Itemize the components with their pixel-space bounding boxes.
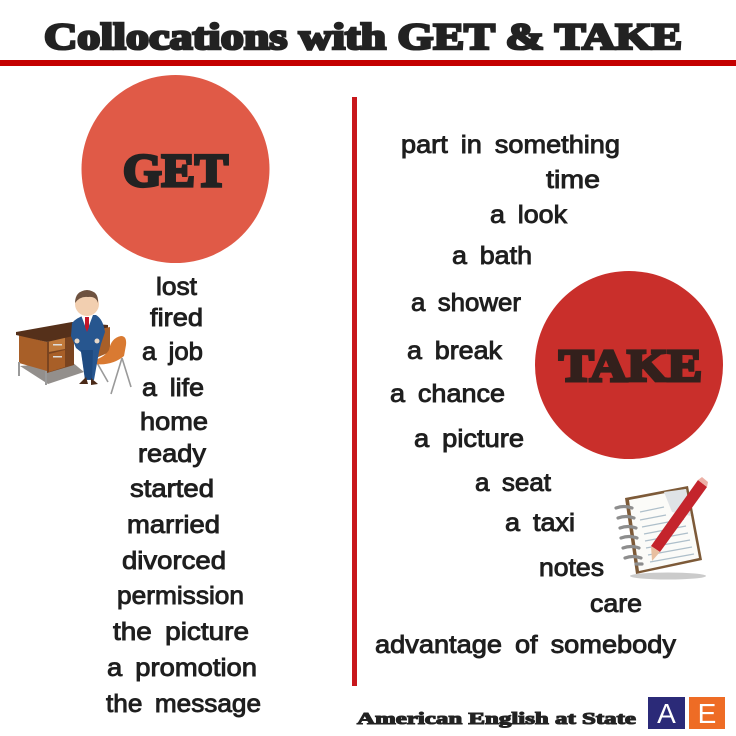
list: TAKE collocations: part in something xyxy=(401,131,620,159)
list: GET collocations: the message xyxy=(106,690,261,718)
footer: source credit: American English at State xyxy=(357,709,637,728)
list: GET collocations: lost xyxy=(156,273,197,301)
list: GET collocations: married xyxy=(127,511,220,539)
logo: AE: A xyxy=(657,698,676,729)
list: TAKE collocations: a break xyxy=(407,337,503,365)
list: GET collocations: permission xyxy=(117,582,244,610)
list: GET collocations: started xyxy=(130,475,214,503)
list: TAKE collocations: time xyxy=(546,166,600,194)
list: TAKE collocations: a taxi xyxy=(505,509,575,537)
list: TAKE collocations: care xyxy=(590,590,642,618)
list: TAKE collocations: a seat xyxy=(475,469,551,497)
list: TAKE collocations: a shower xyxy=(411,289,521,317)
circle: GET xyxy=(82,75,270,263)
list: TAKE collocations: advantage of somebody xyxy=(375,631,677,659)
title underline xyxy=(0,60,736,66)
icon: notepad and pencil xyxy=(616,477,708,580)
icon: businessman at desk xyxy=(16,290,131,394)
list: GET collocations: a life xyxy=(142,374,204,402)
list: TAKE collocations: a picture xyxy=(414,425,524,453)
list: GET collocations xyxy=(106,273,261,718)
list: GET collocations: divorced xyxy=(122,547,226,575)
list: TAKE collocations xyxy=(375,131,677,659)
list: GET collocations: fired xyxy=(150,304,203,332)
circle: TAKE: TAKE xyxy=(559,341,702,391)
title: Collocations with GET & TAKE xyxy=(44,17,682,58)
list: TAKE collocations: a chance xyxy=(390,380,505,408)
list: TAKE collocations: notes xyxy=(539,554,604,582)
list: GET collocations: home xyxy=(140,408,208,436)
logo: AE: E xyxy=(698,698,716,729)
logo: AE xyxy=(648,697,725,729)
list: GET collocations: a promotion xyxy=(107,654,257,682)
circle: TAKE xyxy=(535,271,723,459)
list: TAKE collocations: a bath xyxy=(452,242,532,270)
list: TAKE collocations: a look xyxy=(490,201,568,229)
list: GET collocations: ready xyxy=(138,440,207,468)
column divider xyxy=(352,97,357,686)
list: GET collocations: a job xyxy=(142,338,203,366)
circle: GET: GET xyxy=(123,145,228,197)
list: GET collocations: the picture xyxy=(113,618,249,646)
